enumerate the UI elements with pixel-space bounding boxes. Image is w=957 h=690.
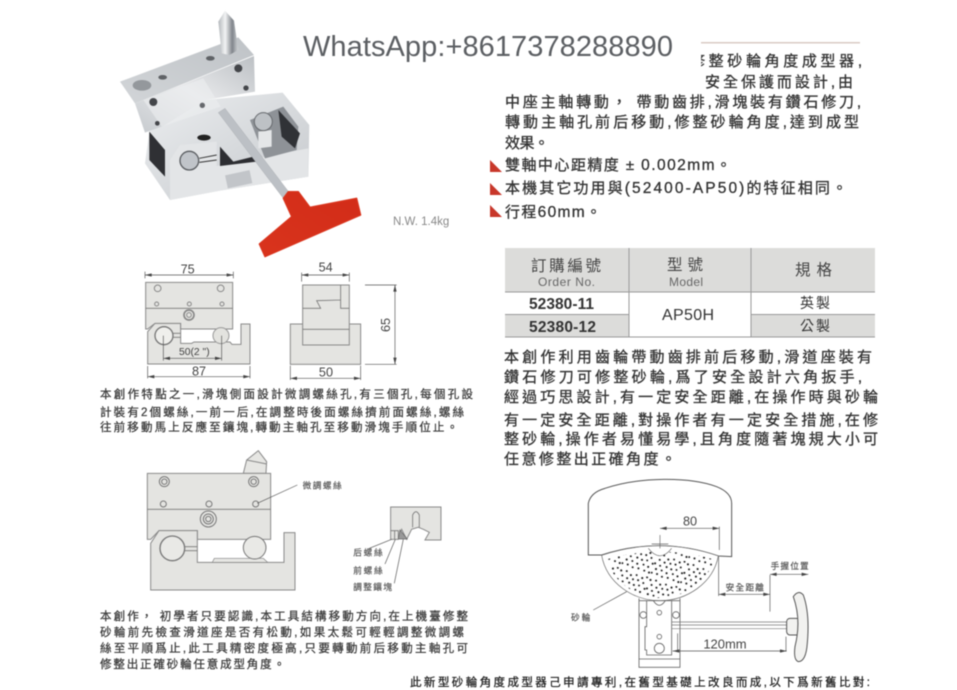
roller left: [155, 327, 173, 345]
header: specification: 規格: [795, 261, 832, 279]
intro line 4: 轉動主軸孔前后移動,修整砂輪角度,達到成型: [505, 114, 859, 131]
dimension 50: 50: [319, 365, 333, 379]
feature 3: 行程60mm。: [505, 204, 601, 221]
order number 2: 52380-12: [529, 319, 596, 336]
label: front screw: 前螺絲: [353, 564, 383, 575]
paragraph line 2: 計裝有2個螺絲,一前一后,在調整時後面螺絲擠前面螺絲,螺絲: [100, 405, 464, 419]
tool holder: [639, 598, 680, 667]
dimension drawing: front view: [145, 263, 250, 379]
dimension: safe distance: 安全距離: [726, 582, 764, 593]
label: wheel: 砂輪: [571, 612, 591, 623]
wheel guard: [588, 479, 732, 557]
label: rear screw: 后螺絲: [353, 547, 383, 558]
spec imperial: 英製: [800, 295, 830, 311]
rail: [212, 558, 268, 562]
dimension drawing: side view: [290, 260, 397, 380]
model value: AP50H: [662, 307, 714, 324]
intro line 3: 中座主軸轉動， 帶動齒排,滑塊裝有鑽石修刀,: [505, 94, 861, 111]
diamond cutter: [243, 451, 267, 473]
header: order number: 訂購編號: [531, 257, 601, 275]
steel rod: [218, 108, 289, 198]
dimension 80: 80: [683, 515, 697, 529]
base body: [148, 323, 250, 364]
description line 6: 任意修整出正確角度。: [504, 450, 676, 468]
upper slide block: [120, 37, 255, 133]
table row 2 background: [505, 315, 875, 337]
guidance line 1: 本創作， 初學者只要認識,本工具結構移動方向,在上機臺修整: [100, 609, 468, 623]
paragraph line 1: 本創作特點之一,滑塊側面設計微調螺絲孔,有三個孔,每個孔設: [100, 387, 473, 401]
bullet triangle 1: [490, 160, 502, 172]
holes: [159, 477, 259, 527]
side slide block: [303, 285, 349, 345]
dimension 65: 65: [379, 318, 393, 332]
bullet triangle 2: [490, 183, 502, 195]
dimension: hand position: [770, 560, 809, 576]
closing line: 此新型砂輪角度成型器己申請專利,在舊型基礎上改良而成,以下爲新舊比對:: [410, 675, 870, 689]
top rule: [701, 42, 860, 44]
header: order number english: Order No.: [538, 275, 595, 289]
table header background: [505, 248, 875, 292]
label: wheel: [571, 592, 627, 623]
right roller: [243, 536, 266, 559]
red T handle: [259, 192, 361, 257]
dimension: safe distance: [719, 557, 770, 612]
upper block: [147, 473, 271, 539]
weight label: N.W. 1.4kg: [393, 216, 449, 228]
base: [151, 531, 295, 590]
intro text block: [505, 53, 862, 152]
rod: [672, 622, 787, 629]
paragraph line 3: 往前移動馬上反應至鑲塊,轉動主軸孔至移動滑塊手順位止。: [100, 420, 458, 434]
WhatsApp watermark: WhatsApp:+8617378288890: [303, 31, 673, 63]
description line 3: 經過巧思設計,有一定安全距離,在操作時與砂輪: [504, 388, 878, 406]
roller right: [213, 328, 229, 344]
description line 5: 整砂輪,操作者易懂易學,且角度隨著塊規大小可: [504, 430, 878, 448]
label: adjusting insert: 調整鑲塊: [353, 581, 392, 592]
guidance line 3: 絲至平順爲止,此工具精密度極高,只要轉動前后移動主軸孔可: [100, 641, 468, 655]
tool base with recess: [145, 93, 309, 200]
header: model english: Model: [669, 275, 703, 289]
description line 4: 有一定安全距離,對操作者有一定安全措施,在修: [504, 411, 878, 429]
spec metric: 公製: [800, 318, 830, 334]
guidance line 2: 砂輪前先檢查滑道座是否有松動,如果太鬆可輕輕調整微調螺: [100, 625, 464, 639]
diamond pin: [218, 11, 238, 55]
feature bullets: [490, 157, 847, 221]
WhatsApp watermark: [298, 28, 701, 86]
merged model cell: [629, 292, 751, 337]
detail section with labels: [353, 507, 441, 592]
bullet triangle 3: [490, 205, 502, 217]
intro line 1: 修整砂輪角度成型器,: [690, 53, 862, 70]
paragraph: fine adjustment: [100, 387, 473, 434]
dimension 87: 87: [192, 365, 206, 379]
upper block: [146, 282, 233, 329]
callout: fine adjust screw: 微調螺絲: [303, 480, 342, 491]
feature 1: 雙軸中心距精度 ± 0.002mm。: [505, 157, 731, 174]
description paragraph right: [504, 349, 878, 468]
section body: [391, 507, 441, 540]
diagram: fine adjust screw assembly: [147, 451, 342, 590]
arbor: [648, 535, 672, 556]
guidance line 4: 修整出正確砂輪任意成型角度。: [100, 657, 285, 671]
order number 1: 52380-11: [529, 296, 594, 313]
block holes: [154, 285, 224, 320]
left roller: [160, 536, 185, 561]
dimension 120mm: 120mm: [703, 636, 747, 651]
diagram: grinding wheel safety distance: [571, 479, 809, 667]
intro line 2: 安全保護而設計,由: [705, 74, 853, 91]
callout: fine adjust screw: [257, 480, 342, 503]
header: model: 型號: [667, 256, 703, 274]
dimension 120mm: [673, 633, 787, 653]
intro line 5: 效果。: [505, 135, 549, 152]
adjusting insert: [398, 530, 407, 539]
side base: [290, 324, 361, 364]
dimension 75: 75: [181, 263, 195, 277]
dimension 54: 54: [319, 260, 333, 274]
paragraph: beginner guidance: [100, 609, 468, 671]
dimension 50(2"): 50(2 "): [179, 347, 210, 358]
dimension 80: [660, 515, 719, 550]
product photo: angle forming tool: [120, 11, 361, 257]
feature 2: 本機其它功用與(52400-AP50)的特征相同。: [505, 179, 847, 197]
T handle: [787, 593, 808, 662]
dimension: hand position: 手握位置: [771, 560, 809, 571]
grinding wheel: [602, 546, 718, 601]
order table: [505, 248, 875, 337]
description line 2: 鑽石修刀可修整砂輪,爲了安全設計六角扳手,: [504, 369, 862, 386]
description line 1: 本創作利用齒輪帶動齒排前后移動,滑道座裝有: [504, 349, 872, 366]
